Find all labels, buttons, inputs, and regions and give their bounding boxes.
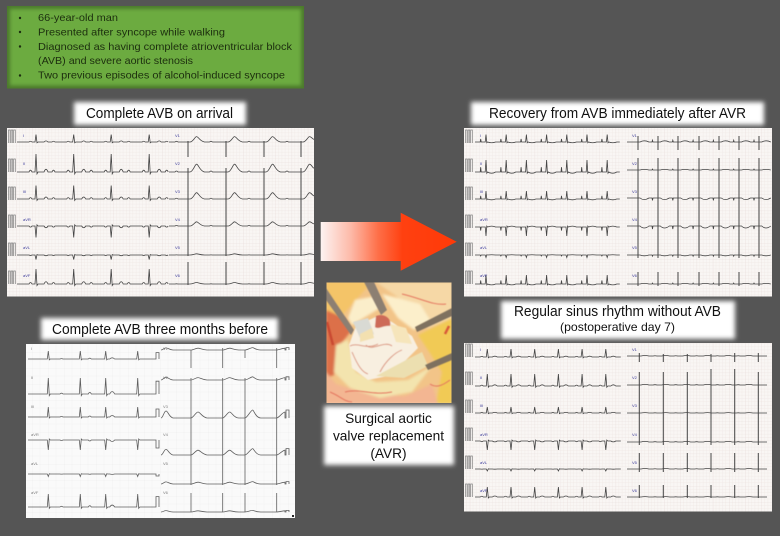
lead labels: V1 <box>632 347 638 352</box>
lead labels: aVF <box>480 488 488 493</box>
summary text: Two previous episodes of alcohol-induced syncope <box>38 70 285 82</box>
heading: regular sinus rhythm: (postoperative day 7) <box>560 320 675 334</box>
caption: surgical aortic valve replacement: valve replacement <box>333 428 444 444</box>
panel: ECG immediately after AVR <box>464 128 772 296</box>
lead labels: V1 <box>163 346 169 351</box>
lead labels: aVR <box>480 217 488 222</box>
heading: recovery from AVB: Recovery from AVB immediately after AVR <box>489 106 746 122</box>
caption: surgical aortic valve replacement: (AVR) <box>370 446 407 461</box>
lead labels: V4 <box>175 217 181 222</box>
lead labels: V2 <box>175 161 181 166</box>
heading: complete AVB three months before: Complete AVB three months before <box>52 322 268 338</box>
heading: complete AVB three months before <box>41 318 278 340</box>
lead labels: aVR <box>23 217 31 222</box>
lead labels: V1 <box>632 133 638 138</box>
lead labels: aVL <box>31 461 39 466</box>
calibration marks <box>466 344 472 497</box>
lead labels: aVF <box>23 273 31 278</box>
lead labels: III <box>23 189 26 194</box>
lead labels: V4 <box>632 217 638 222</box>
lead labels: I <box>23 133 24 138</box>
lead labels: V3 <box>632 403 638 408</box>
calibration marks <box>8 130 15 284</box>
lead labels <box>23 133 181 278</box>
heading: recovery from AVB <box>471 102 764 125</box>
lead labels: V5 <box>163 461 169 466</box>
calibration marks <box>466 130 472 284</box>
panel: patient summary <box>7 6 304 88</box>
summary text: 66-year-old man <box>38 13 118 24</box>
limb leads <box>17 134 168 286</box>
limb leads <box>475 134 620 285</box>
lead labels: V6 <box>632 273 638 278</box>
lead labels: V2 <box>163 375 169 380</box>
lead labels: I <box>31 346 32 351</box>
limb leads <box>28 351 159 508</box>
heading: complete AVB on arrival: Complete AVB on arrival <box>86 106 233 122</box>
summary text: Presented after syncope while walking <box>38 28 225 38</box>
panel: ECG three months before <box>26 344 295 518</box>
lead labels: aVL <box>480 245 488 250</box>
lead labels: V5 <box>632 245 638 250</box>
summary bullet dots <box>19 17 21 77</box>
lead labels: aVF <box>480 273 488 278</box>
lead labels: aVF <box>31 490 39 495</box>
panel: ECG postoperative day 7 <box>464 343 772 512</box>
calcified valve <box>349 316 418 380</box>
lead labels: III <box>31 404 34 409</box>
retractors <box>326 282 452 370</box>
precordial leads <box>627 353 767 498</box>
lead labels: aVL <box>480 460 488 465</box>
precordial leads <box>161 348 289 512</box>
lead labels: I <box>480 347 481 352</box>
lead labels: II <box>480 375 482 380</box>
lead labels: III <box>480 189 483 194</box>
panel: ECG on arrival <box>7 128 314 296</box>
lead labels: V2 <box>632 161 638 166</box>
lead labels: I <box>480 133 481 138</box>
lead labels: II <box>31 375 33 380</box>
tissue background <box>326 282 367 314</box>
lead labels: II <box>23 161 25 166</box>
lead labels: V4 <box>632 432 638 437</box>
precordial leads <box>627 136 771 286</box>
lead labels <box>480 347 638 493</box>
caption: surgical aortic valve replacement <box>324 406 454 465</box>
lead labels: V3 <box>175 189 181 194</box>
lead labels: III <box>480 403 483 408</box>
limb leads <box>475 349 621 498</box>
lead labels: aVR <box>31 432 39 437</box>
lead labels <box>480 133 638 278</box>
lead labels: II <box>480 161 482 166</box>
lead labels: V1 <box>175 133 181 138</box>
lead labels <box>31 346 169 495</box>
lead labels: V4 <box>163 432 169 437</box>
heading: regular sinus rhythm <box>501 301 735 339</box>
lead labels: V3 <box>163 404 169 409</box>
heading: complete AVB on arrival <box>74 102 246 125</box>
lead labels: aVR <box>480 432 488 437</box>
lead labels: V6 <box>175 273 181 278</box>
caption: surgical aortic valve replacement: Surgical aortic <box>345 411 432 426</box>
lead labels: V6 <box>163 490 169 495</box>
precordial leads <box>169 137 314 285</box>
arrow <box>321 213 457 271</box>
photo: surgical aortic valve <box>326 282 452 404</box>
lead labels: V5 <box>632 460 638 465</box>
lead labels: V6 <box>632 488 638 493</box>
heading: regular sinus rhythm: Regular sinus rhythm without AVB <box>514 304 721 320</box>
lead labels: V2 <box>632 375 638 380</box>
lead labels: V5 <box>175 245 181 250</box>
lead labels: aVL <box>23 245 31 250</box>
lead labels: V3 <box>632 189 638 194</box>
summary text: Diagnosed as having complete atrioventricular block <box>38 42 293 53</box>
summary text: (AVB) and severe aortic stenosis <box>38 56 193 67</box>
summary text <box>38 13 293 82</box>
